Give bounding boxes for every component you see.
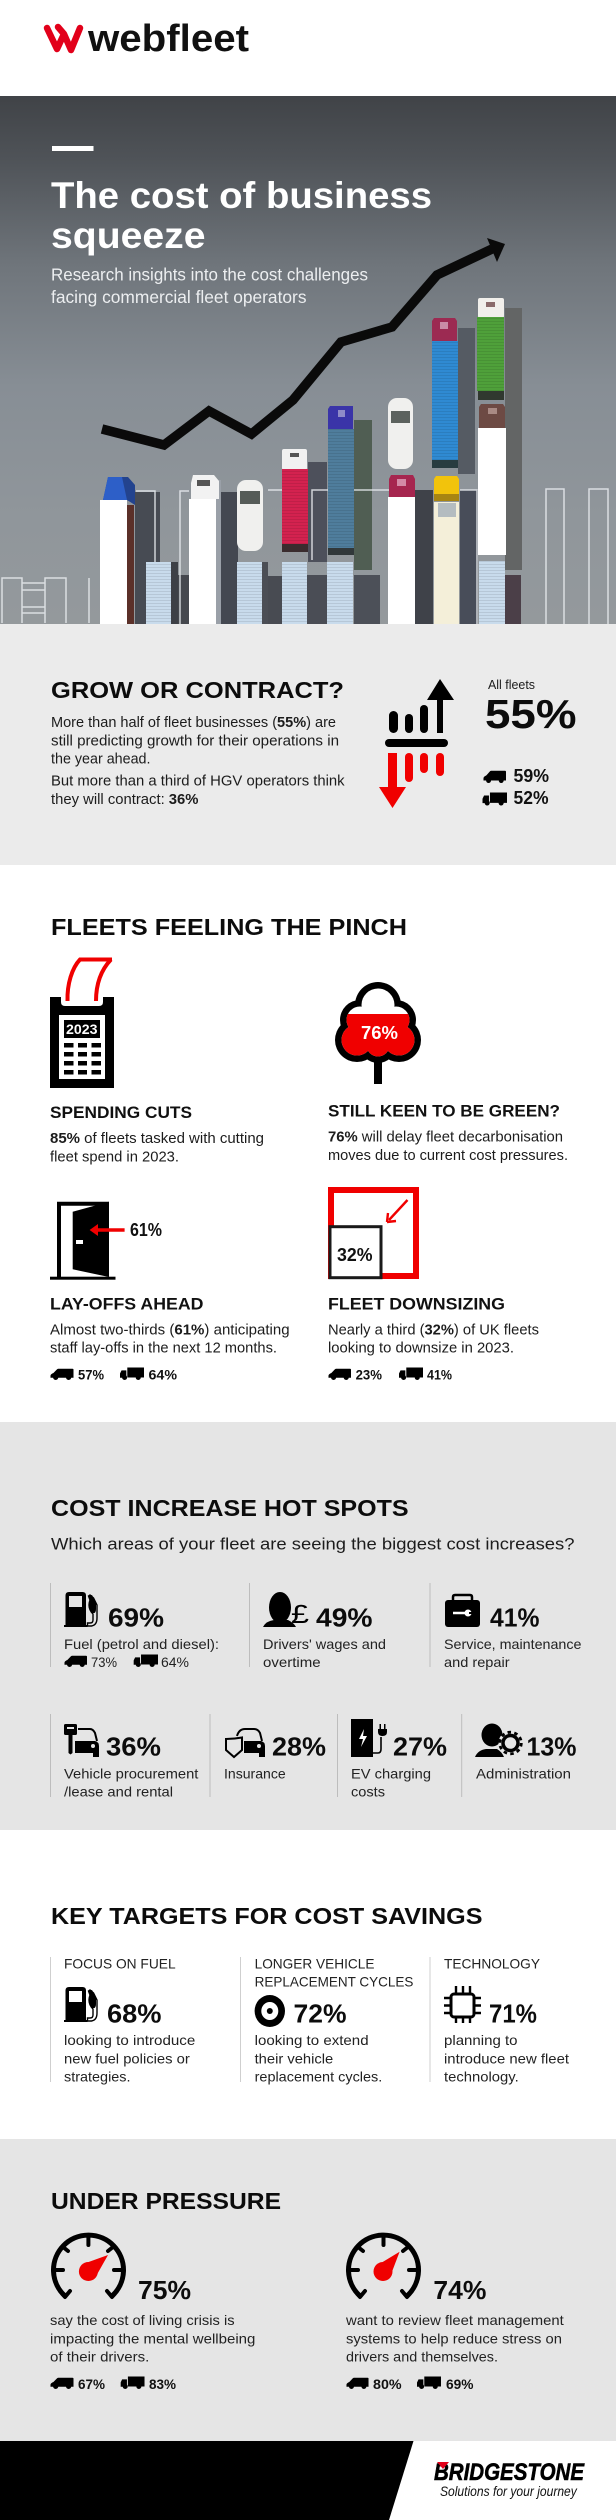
block: fleet downsizing: Nearly a third (32%) of UK fleets [328, 1322, 539, 1338]
icon: up and down bars with arrows [379, 679, 454, 808]
block: spending cuts [50, 1104, 264, 1166]
stat: all fleets 55%: All fleets [488, 677, 535, 692]
vehicle split: 67% and 83% [50, 2376, 176, 2392]
column: longer vehicle replacement cycles: LONGER VEHICLE [255, 1956, 374, 1971]
column: technology: planning to [444, 2033, 518, 2048]
photo: parking bay markings [2, 489, 608, 624]
block: lay-offs ahead [50, 1295, 290, 1382]
item: insurance 28%: 28% [272, 1734, 326, 1762]
column: longer vehicle replacement cycles: looking to extend [255, 2033, 369, 2048]
logo: bridgestone: BRIDGESTONE [434, 2459, 585, 2486]
block: lay-offs ahead: Almost two-thirds ( 61%) anticipating [50, 1322, 290, 1338]
icon: door with 61%: 61% [130, 1220, 162, 1240]
text: mental wellbeing [50, 2313, 255, 2365]
item: vehicle procurement 36%: Vehicle procurement [64, 1766, 199, 1781]
heading: KEY TARGETS FOR COST SAVINGS [51, 1903, 482, 1929]
item: service 41%: and repair [444, 1655, 510, 1670]
text: fleet management review: drivers and themselves. [346, 2350, 498, 2365]
container: light blue [237, 562, 262, 624]
column: focus on fuel: looking to introduce [64, 2033, 195, 2048]
stat: 74%: 74% [433, 2277, 486, 2305]
block: still keen to be green: STILL KEEN TO BE GREEN? [328, 1103, 560, 1121]
panel: fleets feeling the pinch [50, 919, 567, 1380]
icon: microchip [444, 1986, 481, 2023]
icon: gauge 75% [53, 2235, 124, 2297]
body text: the year ahead. [51, 752, 150, 768]
truck: maroon cab blue trailer [432, 318, 458, 468]
stat: all fleets 55%: 55% [485, 691, 576, 737]
column: focus on fuel: new fuel policies or [64, 2051, 190, 2066]
heading: COST INCREASE HOT SPOTS [51, 1495, 409, 1521]
icon: key and car [64, 1724, 99, 1757]
icon: shield and car [226, 1729, 265, 1757]
decorative title bar [52, 146, 94, 151]
column: longer vehicle replacement cycles: 72% [294, 2001, 346, 2029]
column: longer vehicle replacement cycles [255, 1956, 413, 2085]
block: fleet downsizing: looking to downsize in 2023. [328, 1340, 514, 1356]
item: ev charging 27%: EV charging [351, 1766, 431, 1781]
icon: tree 76% [335, 982, 421, 1084]
item: administration 13% [475, 1724, 576, 1781]
item: drivers wages 49%: 49% [316, 1605, 372, 1633]
item: ev charging 27%: costs [351, 1785, 385, 1800]
icon: calculator with receipt [50, 960, 114, 1088]
container: light blue [282, 562, 307, 624]
body text: still predicting growth for their operations in [51, 734, 339, 750]
icon: door with 61% [50, 1202, 162, 1280]
heading: UNDER PRESSURE [51, 2188, 281, 2214]
icon: charging station [351, 1719, 387, 1757]
truck: yellow cab cream trailer [434, 476, 459, 624]
block: lay-offs ahead: LAY-OFFS AHEAD [50, 1295, 204, 1313]
header: webfleet logo [0, 0, 616, 96]
subtitle: facing commercial fleet operators [51, 287, 307, 307]
body text: they will contract: 36% [51, 792, 199, 808]
text: fleet management review: want to review fleet management [345, 2313, 564, 2328]
subtitle [51, 264, 368, 307]
container: light blue [327, 562, 353, 624]
stat: trucks 52% [482, 788, 548, 808]
vehicle split: 80% and 69% [346, 2376, 474, 2392]
column: longer vehicle replacement cycles: REPLACEMENT CYCLES [255, 1975, 413, 1990]
body text: More than half of fleet businesses (55%) are [51, 715, 336, 731]
block: still keen to be green [328, 1103, 568, 1164]
text: fleet management review: systems to help reduce stress on [346, 2331, 562, 2346]
item: service 41%: Service, maintenance [444, 1637, 582, 1652]
text: mental wellbeing: of their drivers. [50, 2350, 149, 2365]
panel: grow or contract [0, 624, 616, 865]
van: white [237, 480, 263, 551]
truck: white cab green trailer [477, 298, 504, 400]
block: lay-offs ahead: 57% [78, 1367, 104, 1382]
block: fleet downsizing: 41% [427, 1367, 452, 1382]
stat: 75%: 75% [138, 2277, 191, 2305]
vehicle split: 80% and 69%: 69% [446, 2377, 474, 2392]
block: spending cuts: 85% of fleets tasked with cutting [50, 1131, 264, 1147]
subtitle: Research insights into the cost challenges [51, 264, 368, 284]
body text: But more than a third of HGV operators think [51, 774, 345, 790]
item: fuel 69%: 64% [161, 1655, 189, 1670]
panel: under pressure [0, 2139, 616, 2441]
icon: toolbox with wrench [445, 1595, 480, 1627]
icon: tyre target [255, 1995, 285, 2027]
column: longer vehicle replacement cycles: replacement cycles. [255, 2070, 382, 2085]
item: drivers wages 49%: Drivers' wages and [263, 1637, 386, 1652]
column: technology: 71% [489, 2001, 537, 2029]
item: vehicle procurement 36%: /lease and rental [64, 1785, 173, 1800]
icon: calculator with receipt: 2023 [66, 1022, 98, 1037]
item: ev charging 27% [351, 1719, 447, 1800]
truck: white cab white trailer [189, 475, 221, 624]
vehicle split: 67% and 83%: 83% [149, 2377, 176, 2392]
stat: all fleets 55% [485, 677, 576, 737]
item: ev charging 27%: 27% [393, 1734, 447, 1762]
icon: webfleet red mark [47, 27, 80, 50]
container: light blue [146, 562, 171, 624]
block: fleet downsizing [328, 1295, 539, 1382]
block: lay-offs ahead: 64% [148, 1367, 177, 1382]
body text [51, 715, 345, 808]
column: technology: TECHNOLOGY [444, 1956, 540, 1971]
icon: shrinking square 32%: 32% [337, 1245, 372, 1265]
title: The cost of business [51, 175, 432, 216]
block: lay-offs ahead: staff lay-offs in the next 12 months. [50, 1340, 277, 1356]
block: spending cuts: SPENDING CUTS [50, 1104, 192, 1122]
item: drivers wages 49%: overtime [263, 1655, 321, 1670]
item: drivers wages 49% [263, 1592, 386, 1670]
stat: vans 59% [483, 766, 549, 786]
icon: shrinking square 32% [330, 1190, 416, 1278]
container: light blue [479, 561, 505, 624]
photo: vehicle shadows [135, 308, 522, 624]
item: fuel 69% [64, 1592, 219, 1670]
panel: key targets for cost savings [0, 1830, 616, 2139]
column: focus on fuel: strategies. [64, 2070, 130, 2085]
item: service 41%: 41% [490, 1605, 540, 1633]
heading: FLEETS FEELING THE PINCH [51, 914, 407, 940]
arrow: rising trend line [102, 238, 505, 445]
heading: GROW OR CONTRACT? [51, 677, 344, 703]
text: mental wellbeing: say the cost of living crisis is [50, 2313, 235, 2328]
title [51, 175, 432, 256]
item: administration 13%: 13% [526, 1734, 576, 1762]
text: mental wellbeing: impacting the mental wellbeing [50, 2331, 255, 2346]
panel: cost increase hot spots [0, 1422, 616, 1830]
block: spending cuts: fleet spend in 2023. [50, 1150, 179, 1166]
vehicle split: 67% and 83%: 67% [78, 2377, 105, 2392]
item: service 41% [444, 1595, 582, 1670]
truck: white cab red trailer [282, 449, 308, 552]
van: white upper [388, 398, 413, 469]
title: squeeze [51, 215, 206, 256]
item: fuel 69%: Fuel (petrol and diesel): [64, 1637, 219, 1652]
panel: hero photo and title [0, 96, 616, 624]
icon: gauge 74% [348, 2235, 418, 2297]
column: technology: technology. [444, 2070, 519, 2085]
item: vehicle procurement 36% [64, 1724, 199, 1800]
truck: brown cab white trailer [478, 404, 506, 555]
item: administration 13%: Administration [476, 1766, 571, 1781]
vehicle split: 80% and 69%: 80% [373, 2377, 402, 2392]
block: still keen to be green: moves due to current cost pressures. [328, 1148, 568, 1164]
wordmark: webfleet [87, 18, 249, 60]
icon: tree 76%: 76% [361, 1022, 398, 1043]
tagline: Solutions for your journey [440, 2483, 578, 2499]
block: fleet downsizing: FLEET DOWNSIZING [328, 1295, 505, 1313]
truck: maroon cab white trailer [388, 475, 415, 624]
text: fleet management review [345, 2313, 564, 2365]
truck: blue cab white trailer [100, 477, 135, 624]
block: still keen to be green: 76% will delay fleet decarbonisation [328, 1130, 563, 1146]
item: insurance 28% [224, 1729, 326, 1781]
item: vehicle procurement 36%: 36% [106, 1734, 161, 1762]
question: Which areas of your fleet are seeing the biggest cost increases? [51, 1535, 574, 1553]
column: technology: introduce new fleet [444, 2051, 569, 2066]
item: fuel 69%: 69% [108, 1605, 164, 1633]
stat: vans 59%: 59% [514, 766, 549, 786]
item: insurance 28%: Insurance [224, 1766, 286, 1781]
column: focus on fuel: FOCUS ON FUEL [64, 1956, 176, 1971]
icon: driver with pound sign: £ [291, 1599, 310, 1629]
column: focus on fuel: 68% [107, 2001, 162, 2029]
item: fuel 69%: 73% [91, 1655, 117, 1670]
icon: person with gear [475, 1724, 522, 1757]
block: fleet downsizing: 23% [356, 1367, 382, 1382]
column: technology [444, 1956, 569, 2085]
column: longer vehicle replacement cycles: their vehicle [255, 2051, 333, 2066]
footer: bridgestone band [0, 2441, 616, 2520]
truck: purple cab slate trailer [328, 406, 354, 555]
stat: trucks 52%: 52% [514, 788, 548, 808]
column: focus on fuel [64, 1956, 195, 2085]
